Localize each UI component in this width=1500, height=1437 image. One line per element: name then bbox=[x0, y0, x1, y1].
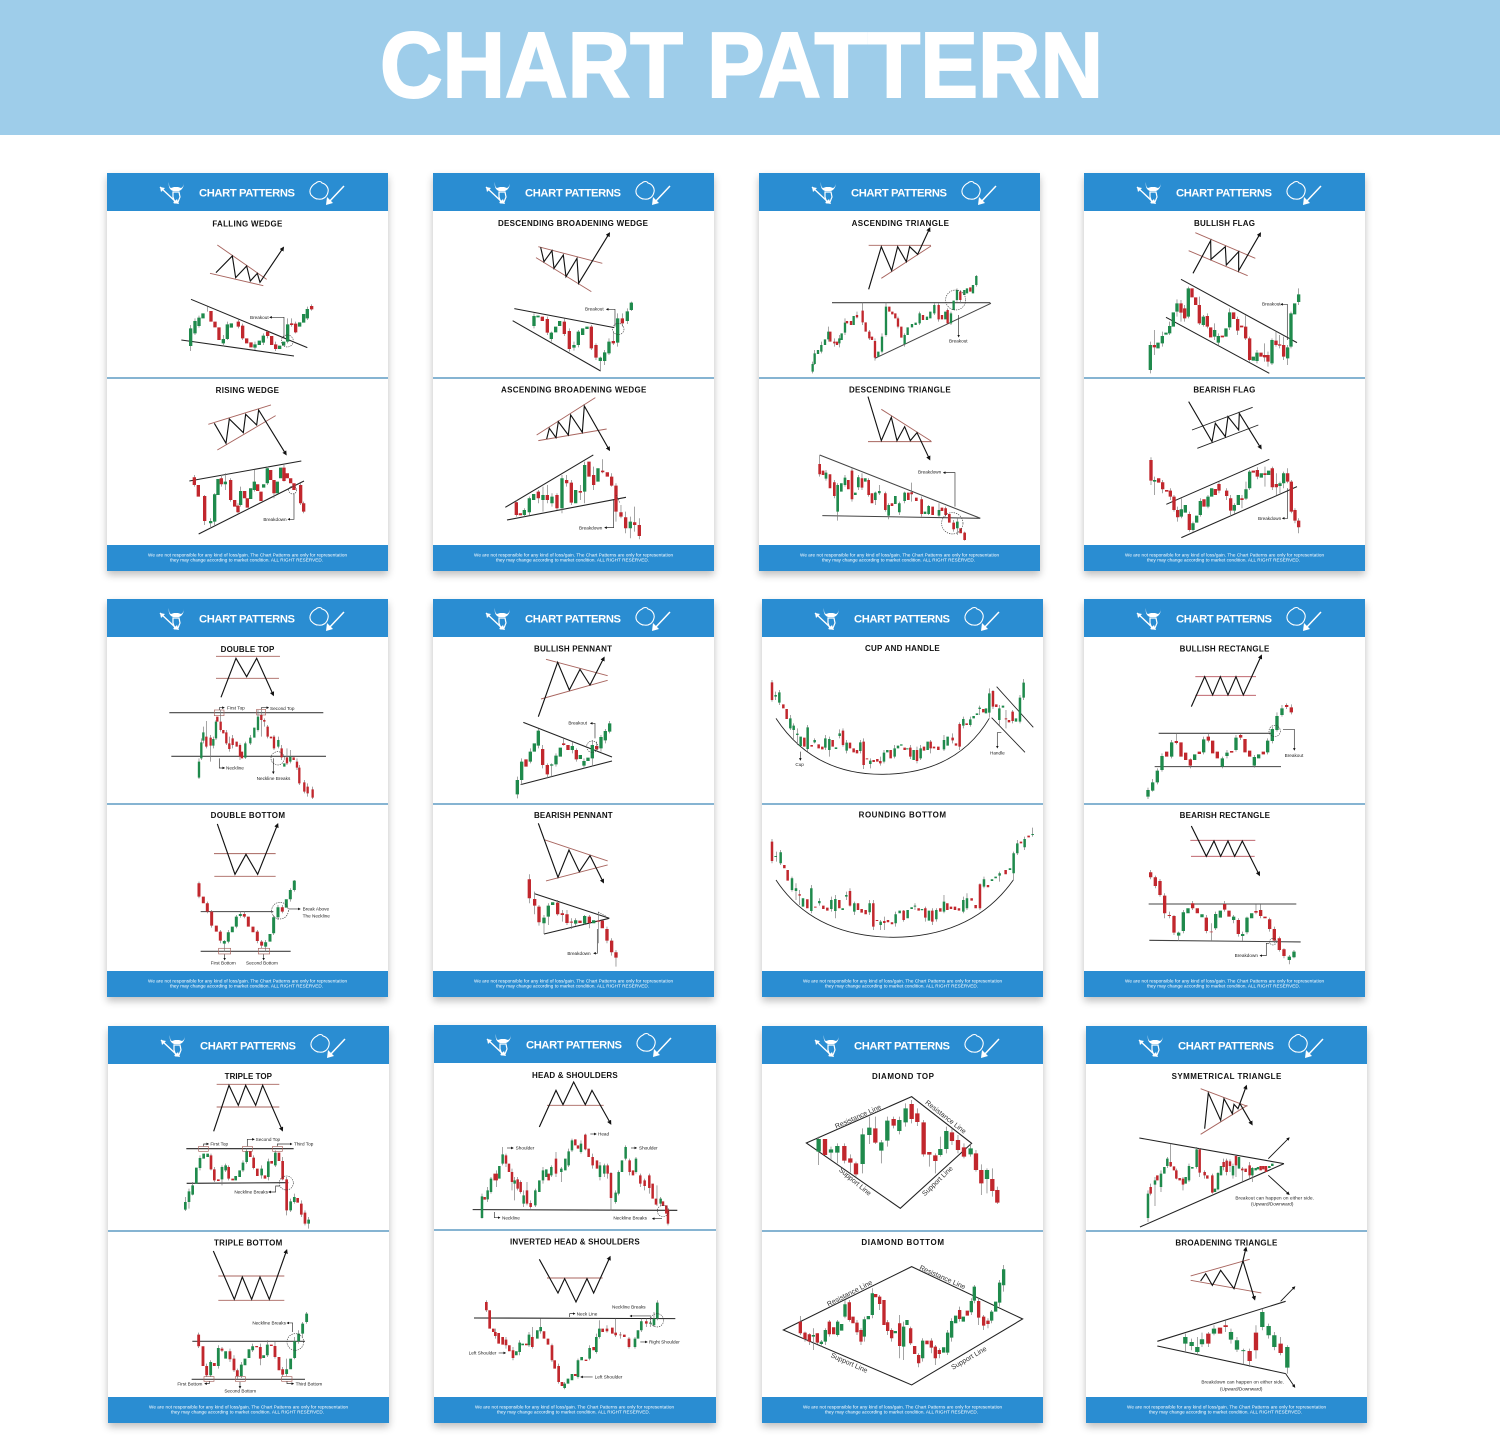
card: wedges bbox=[107, 173, 388, 575]
candlestick chart: rising wedge: Breakdown bbox=[263, 517, 287, 522]
candlestick chart: cup and handle: Cup bbox=[795, 762, 804, 767]
heading: bullish rectangle: BULLISH RECTANGLE bbox=[1180, 645, 1270, 654]
candlestick chart: descending triangle bbox=[820, 455, 980, 541]
card frame: they may change according to market condition. ALL RIGHT RESERVED. bbox=[496, 984, 649, 989]
candlestick chart: diamond top: Resistance Line bbox=[834, 1104, 883, 1131]
schematic: bullish pennant bbox=[538, 658, 608, 717]
card frame: We are not responsible for any kind of loss/gain. The Chart Patterns are only for representation bbox=[803, 1405, 1002, 1410]
candlestick chart: diamond top: Resistance Line bbox=[923, 1099, 967, 1136]
card frame: We are not responsible for any kind of loss/gain. The Chart Patterns are only for representation bbox=[1125, 979, 1324, 984]
candlestick chart: ascending triangle: Breakout bbox=[949, 338, 968, 343]
card frame bbox=[433, 173, 714, 575]
candlestick chart: diamond bottom bbox=[783, 1265, 1023, 1385]
card frame: CHART PATTERNS bbox=[1176, 188, 1273, 200]
candlestick chart: double top: Neckline Breaks bbox=[257, 776, 291, 781]
schematic: bullish rectangle bbox=[1191, 656, 1261, 707]
candlestick chart: triple bottom: Neckline Breaks bbox=[252, 1321, 287, 1326]
candlestick chart: bearish rectangle: Breakdown bbox=[1235, 953, 1258, 958]
card frame: We are not responsible for any kind of loss/gain. The Chart Patterns are only for representation bbox=[474, 553, 673, 558]
title banner bbox=[0, 0, 1500, 135]
heading: descending broadening wedge: DESCENDING BROADENING WEDGE bbox=[498, 219, 649, 228]
card frame: We are not responsible for any kind of loss/gain. The Chart Patterns are only for representation bbox=[474, 979, 673, 984]
panel: head and shoulders patterns bbox=[469, 1071, 680, 1389]
candlestick chart: inverted head and shoulders: Neck Line bbox=[577, 1311, 598, 1316]
title: CHART PATTERN bbox=[380, 13, 1103, 117]
candlestick chart: ascending broadening wedge bbox=[505, 455, 639, 539]
card frame: CHART PATTERNS bbox=[526, 1040, 623, 1052]
panel: triangle patterns bbox=[813, 219, 991, 541]
heading: bullish flag: BULLISH FLAG bbox=[1194, 219, 1255, 228]
card frame: they may change according to market condition. ALL RIGHT RESERVED. bbox=[825, 984, 978, 989]
card frame: they may change according to market condition. ALL RIGHT RESERVED. bbox=[825, 1410, 978, 1415]
candlestick chart: falling wedge bbox=[181, 299, 312, 356]
schematic: ascending broadening wedge bbox=[537, 398, 609, 450]
candlestick chart: triple top bbox=[185, 1137, 314, 1229]
card: head and shoulders bbox=[434, 1025, 716, 1427]
candlestick chart: double bottom: Second Bottom bbox=[246, 961, 278, 966]
panel: flag patterns bbox=[1150, 219, 1299, 538]
card frame bbox=[108, 1026, 389, 1427]
candlestick chart: cup and handle bbox=[772, 679, 1033, 774]
schematic: head and shoulders bbox=[539, 1082, 611, 1127]
candlestick chart: bullish flag: Breakout bbox=[1262, 302, 1281, 307]
heading: rounding bottom: ROUNDING BOTTOM bbox=[859, 810, 946, 819]
card frame: We are not responsible for any kind of loss/gain. The Chart Patterns are only for representation bbox=[803, 979, 1002, 984]
heading: bearish pennant: BEARISH PENNANT bbox=[534, 811, 613, 820]
card frame: CHART PATTERNS bbox=[525, 188, 622, 200]
card frame bbox=[762, 599, 1043, 1001]
card frame: they may change according to market condition. ALL RIGHT RESERVED. bbox=[822, 558, 975, 563]
card: rectangles bbox=[1084, 599, 1365, 1001]
card frame: We are not responsible for any kind of loss/gain. The Chart Patterns are only for representation bbox=[1127, 1405, 1326, 1410]
candlestick chart: broadening triangle: (Upward/Downward) bbox=[1220, 1386, 1263, 1391]
panel: rectangle patterns bbox=[1148, 645, 1304, 964]
card: rounded patterns bbox=[762, 599, 1043, 1001]
card frame bbox=[759, 173, 1040, 575]
heading: broadening triangle: BROADENING TRIANGLE bbox=[1175, 1238, 1278, 1247]
candlestick chart: triple top: Third Top bbox=[294, 1142, 314, 1147]
card: diamonds bbox=[762, 1026, 1043, 1427]
card frame: We are not responsible for any kind of loss/gain. The Chart Patterns are only for representation bbox=[1125, 553, 1324, 558]
candlestick chart: cup and handle: Handle bbox=[990, 750, 1005, 755]
candlestick chart: symmetrical triangle: Breakout can happen on either side. bbox=[1235, 1195, 1314, 1200]
candlestick chart: double top bbox=[169, 706, 326, 799]
heading: bearish rectangle: BEARISH RECTANGLE bbox=[1180, 811, 1271, 820]
heading: ascending broadening wedge: ASCENDING BROADENING WEDGE bbox=[501, 386, 647, 395]
candlestick chart: bearish flag: Breakdown bbox=[1258, 516, 1282, 521]
schematic: falling wedge bbox=[210, 245, 283, 286]
heading: triple bottom: TRIPLE BOTTOM bbox=[214, 1238, 283, 1247]
card frame: We are not responsible for any kind of loss/gain. The Chart Patterns are only for representation bbox=[475, 1405, 674, 1410]
card frame: they may change according to market condition. ALL RIGHT RESERVED. bbox=[171, 1410, 324, 1415]
candlestick chart: head and shoulders: Shoulder bbox=[516, 1146, 535, 1151]
card frame: CHART PATTERNS bbox=[199, 188, 296, 200]
heading: diamond bottom: DIAMOND BOTTOM bbox=[861, 1238, 944, 1247]
candlestick chart: diamond bottom: Support Line bbox=[950, 1346, 988, 1372]
candlestick chart: diamond top: Support Line bbox=[837, 1167, 872, 1198]
candlestick chart: triple top: First Top bbox=[210, 1142, 229, 1147]
candlestick chart: triple bottom: Second Bottom bbox=[224, 1389, 256, 1394]
heading: symmetrical triangle: SYMMETRICAL TRIANGLE bbox=[1172, 1072, 1282, 1081]
card: broadening wedges bbox=[433, 173, 714, 575]
candlestick chart: double top: Neckline bbox=[226, 766, 244, 771]
schematic: descending broadening wedge bbox=[536, 233, 609, 292]
heading: inverted head and shoulders: INVERTED HEAD & SHOULDERS bbox=[510, 1237, 640, 1246]
card frame: CHART PATTERNS bbox=[1176, 614, 1273, 626]
card frame: CHART PATTERNS bbox=[1178, 1041, 1275, 1053]
candlestick chart: diamond bottom: Resistance Line bbox=[918, 1265, 966, 1291]
card frame: CHART PATTERNS bbox=[854, 1041, 951, 1053]
candlestick chart: bearish flag bbox=[1151, 457, 1299, 538]
candlestick chart: bearish pennant bbox=[529, 874, 616, 967]
candlestick chart: bullish rectangle bbox=[1148, 703, 1304, 799]
heading: double top: DOUBLE TOP bbox=[221, 645, 275, 654]
candlestick chart: ascending broadening wedge: Breakdown bbox=[579, 525, 603, 530]
candlestick chart: triple bottom: Third Bottom bbox=[296, 1381, 322, 1386]
heading: bullish pennant: BULLISH PENNANT bbox=[534, 645, 612, 654]
card frame: CHART PATTERNS bbox=[200, 1041, 297, 1053]
candlestick chart: rounding bottom bbox=[772, 828, 1033, 937]
schematic: double bottom bbox=[214, 824, 278, 876]
candlestick chart: symmetrical triangle bbox=[1139, 1138, 1314, 1227]
card frame: We are not responsible for any kind of loss/gain. The Chart Patterns are only for representation bbox=[148, 979, 347, 984]
candlestick chart: bearish rectangle bbox=[1149, 870, 1301, 964]
candlestick chart: inverted head and shoulders: Left Shoulder bbox=[469, 1351, 497, 1356]
heading: triple top: TRIPLE TOP bbox=[225, 1072, 273, 1081]
candlestick chart: inverted head and shoulders: Left Shoulder bbox=[595, 1375, 623, 1380]
candlestick chart: triple top: Second Top bbox=[256, 1137, 281, 1142]
candlestick chart: broadening triangle bbox=[1157, 1287, 1295, 1391]
candlestick chart: diamond top bbox=[806, 1097, 997, 1208]
candlestick chart: triple bottom bbox=[177, 1312, 322, 1394]
card frame: they may change according to market condition. ALL RIGHT RESERVED. bbox=[1147, 984, 1300, 989]
card frame: they may change according to market condition. ALL RIGHT RESERVED. bbox=[496, 558, 649, 563]
candlestick chart: inverted head and shoulders: Neckline Breaks bbox=[612, 1305, 646, 1310]
panel: double patterns bbox=[169, 645, 330, 966]
card frame: CHART PATTERNS bbox=[199, 614, 296, 626]
candlestick chart: diamond bottom: Resistance Line bbox=[826, 1280, 874, 1308]
heading: head and shoulders: HEAD & SHOULDERS bbox=[532, 1071, 618, 1080]
candlestick chart: triple top: Neckline Breaks bbox=[234, 1190, 269, 1195]
schematic: descending triangle bbox=[868, 397, 932, 459]
card frame: We are not responsible for any kind of loss/gain. The Chart Patterns are only for representation bbox=[149, 1405, 348, 1410]
card: pennants bbox=[433, 599, 714, 1001]
candlestick chart: double top: First Top bbox=[227, 706, 245, 711]
heading: ascending triangle: ASCENDING TRIANGLE bbox=[852, 219, 950, 228]
schematic: rising wedge bbox=[208, 405, 286, 454]
candlestick chart: double bottom: First Bottom bbox=[211, 961, 236, 966]
card: flags bbox=[1084, 173, 1365, 575]
schematic: bearish rectangle bbox=[1190, 826, 1259, 875]
panel: diamond patterns bbox=[783, 1072, 1023, 1385]
schematic: bearish flag bbox=[1189, 402, 1261, 448]
panel: rounded patterns bbox=[772, 644, 1033, 937]
heading: rising wedge: RISING WEDGE bbox=[216, 386, 280, 395]
card frame: they may change according to market condition. ALL RIGHT RESERVED. bbox=[1147, 558, 1300, 563]
card frame: We are not responsible for any kind of loss/gain. The Chart Patterns are only for representation bbox=[800, 553, 999, 558]
candlestick chart: head and shoulders: Shoulder bbox=[639, 1146, 658, 1151]
card frame: they may change according to market condition. ALL RIGHT RESERVED. bbox=[497, 1410, 650, 1415]
schematic: inverted head and shoulders bbox=[539, 1257, 610, 1302]
card frame bbox=[1084, 173, 1365, 575]
card frame: CHART PATTERNS bbox=[854, 614, 951, 626]
candlestick chart: bullish pennant bbox=[517, 721, 612, 798]
heading: falling wedge: FALLING WEDGE bbox=[212, 219, 283, 228]
schematic: symmetrical triangle bbox=[1201, 1086, 1252, 1134]
candlestick chart: diamond top: Support Line bbox=[921, 1165, 955, 1198]
card: triple patterns bbox=[108, 1026, 389, 1427]
card frame bbox=[107, 173, 388, 575]
candlestick chart: descending broadening wedge bbox=[513, 302, 631, 371]
card: symmetrical and broadening triangles bbox=[1086, 1026, 1367, 1427]
card: triangles bbox=[759, 173, 1040, 575]
card frame: they may change according to market condition. ALL RIGHT RESERVED. bbox=[170, 558, 323, 563]
panel: triple patterns bbox=[177, 1072, 322, 1394]
heading: double bottom: DOUBLE BOTTOM bbox=[211, 811, 285, 820]
candlestick chart: inverted head and shoulders bbox=[469, 1300, 680, 1389]
candlestick chart: head and shoulders: Head bbox=[598, 1132, 610, 1137]
candlestick chart: rising wedge bbox=[189, 461, 304, 534]
heading: cup and handle: CUP AND HANDLE bbox=[865, 644, 940, 653]
candlestick chart: descending triangle: Breakdown bbox=[918, 470, 942, 475]
card frame bbox=[434, 1025, 716, 1427]
card frame: CHART PATTERNS bbox=[851, 188, 948, 200]
candlestick chart: diamond bottom: Support Line bbox=[829, 1352, 869, 1375]
heading: diamond top: DIAMOND TOP bbox=[872, 1072, 935, 1081]
card frame: they may change according to market condition. ALL RIGHT RESERVED. bbox=[170, 984, 323, 989]
heading: descending triangle: DESCENDING TRIANGLE bbox=[849, 386, 951, 395]
candlestick chart: head and shoulders: Neckline bbox=[502, 1215, 520, 1220]
candlestick chart: inverted head and shoulders: Right Shoulder bbox=[649, 1340, 680, 1345]
card frame: they may change according to market condition. ALL RIGHT RESERVED. bbox=[1149, 1410, 1302, 1415]
candlestick chart: bullish rectangle: Breakout bbox=[1285, 753, 1304, 758]
panel: wedge patterns bbox=[181, 219, 312, 534]
panel: broadening wedge patterns bbox=[498, 219, 649, 539]
card frame: CHART PATTERNS bbox=[525, 614, 622, 626]
schematic: double top bbox=[216, 656, 280, 697]
candlestick chart: double top: Second Top bbox=[270, 706, 295, 711]
card frame bbox=[1084, 599, 1365, 1001]
card frame bbox=[433, 599, 714, 1001]
panel: triangle patterns bbox=[1139, 1072, 1314, 1391]
card: double patterns bbox=[107, 599, 388, 1001]
panel: pennant patterns bbox=[517, 645, 616, 967]
schematic: triple top bbox=[214, 1084, 282, 1131]
candlestick chart: broadening triangle: Breakdown can happen on either side. bbox=[1201, 1380, 1284, 1385]
candlestick chart: double bottom: The Neckline bbox=[303, 913, 330, 918]
candlestick chart: triple bottom: First Bottom bbox=[177, 1381, 203, 1386]
candlestick chart: falling wedge: Breakout bbox=[250, 315, 269, 320]
schematic: ascending triangle bbox=[869, 228, 931, 289]
candlestick chart: double bottom bbox=[199, 880, 330, 966]
heading: bearish flag: BEARISH FLAG bbox=[1193, 386, 1255, 395]
candlestick chart: ascending triangle bbox=[813, 275, 991, 373]
candlestick chart: bullish pennant: Breakout bbox=[568, 721, 588, 726]
candlestick chart: double bottom: Break Above bbox=[303, 907, 329, 912]
candlestick chart: head and shoulders: Neckline Breaks bbox=[613, 1216, 648, 1221]
candlestick chart: descending broadening wedge: Breakout bbox=[585, 307, 604, 312]
candlestick chart: symmetrical triangle: (Upward/Downward) bbox=[1251, 1201, 1294, 1206]
card frame bbox=[762, 1026, 1043, 1427]
card frame bbox=[107, 599, 388, 1001]
candlestick chart: bearish pennant: Breakdown bbox=[567, 951, 591, 956]
schematic: broadening triangle bbox=[1191, 1248, 1261, 1299]
candlestick chart: bullish flag bbox=[1150, 279, 1299, 373]
schematic: triple bottom bbox=[213, 1250, 287, 1300]
card frame: We are not responsible for any kind of loss/gain. The Chart Patterns are only for representation bbox=[148, 553, 347, 558]
card frame bbox=[1086, 1026, 1367, 1427]
schematic: bullish flag bbox=[1189, 233, 1260, 276]
schematic: bearish pennant bbox=[538, 823, 608, 882]
candlestick chart: head and shoulders bbox=[473, 1132, 677, 1225]
